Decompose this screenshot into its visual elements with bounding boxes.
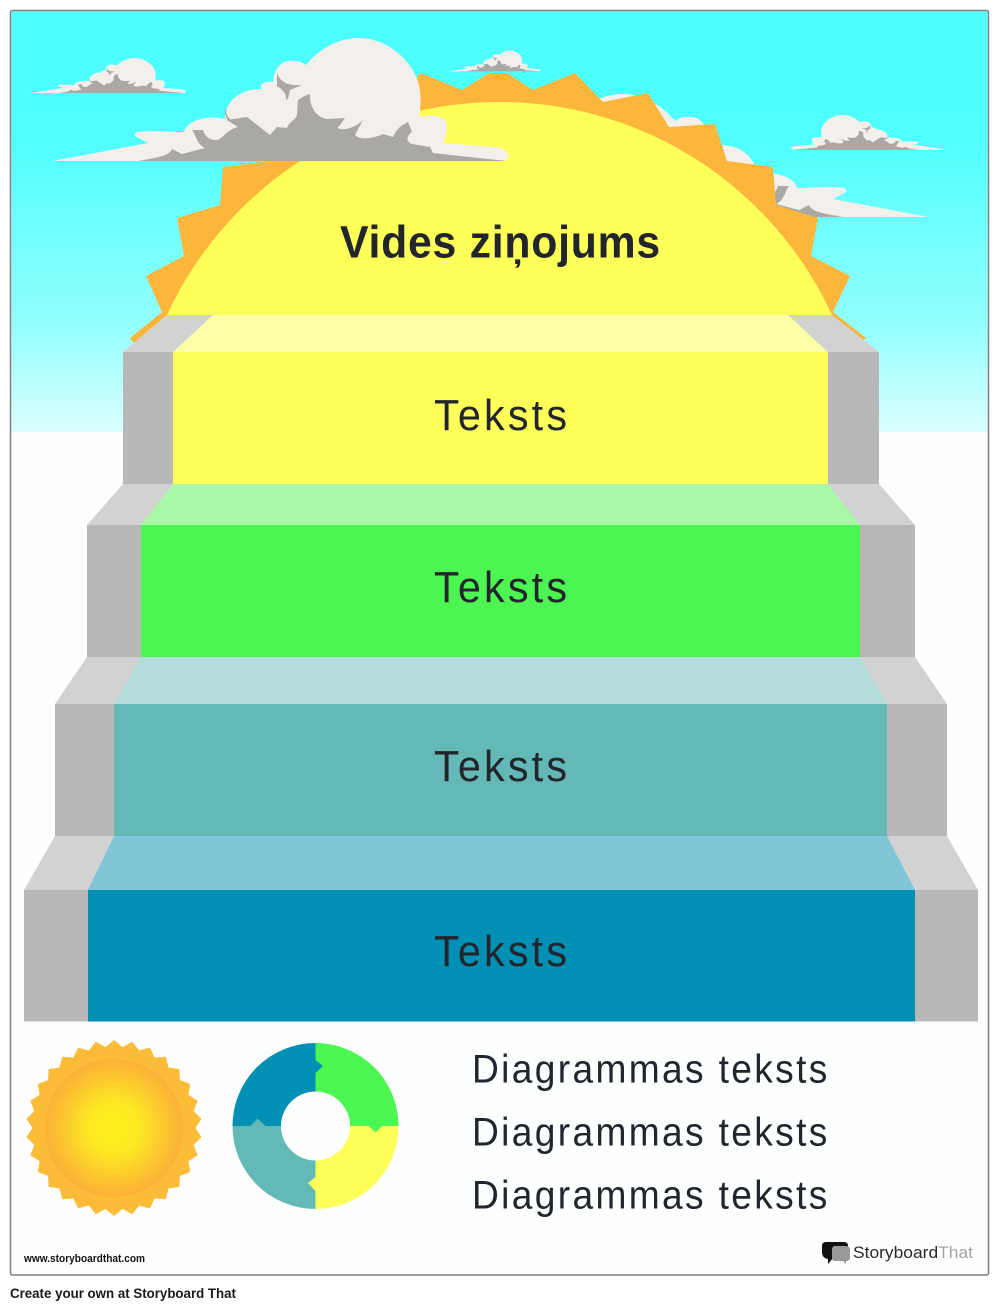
step 4: blue <box>24 836 978 1022</box>
step 3 label: Teksts <box>434 742 567 791</box>
step 2: green <box>87 484 915 657</box>
website url: www.storyboardthat.com <box>23 1253 145 1265</box>
legend line 1: Diagrammas teksts <box>472 1047 827 1092</box>
step 4 label: Teksts <box>434 927 567 976</box>
logo: Storyboard That: Storyboard That <box>853 1244 973 1262</box>
title: Vides ziņojums <box>340 218 660 268</box>
cloud: small right <box>791 115 947 150</box>
cloud: large right behind the sun <box>473 94 928 217</box>
legend line 2: Diagrammas teksts <box>472 1110 827 1155</box>
sun disc <box>167 102 832 315</box>
cloud: small top left <box>30 58 186 93</box>
step 2 label: Teksts <box>434 563 567 612</box>
legend text <box>472 1047 827 1218</box>
icon: small sun <box>26 1040 202 1216</box>
step 3: teal <box>55 657 947 836</box>
cloud: small top centre <box>448 50 540 71</box>
footer caption: Create your own at Storyboard That <box>10 1285 236 1301</box>
logo: Storyboard That <box>822 1242 973 1264</box>
step 1 label: Teksts <box>434 391 567 440</box>
step 1: yellow <box>123 315 879 484</box>
cloud: large left in front of the sun <box>53 38 508 161</box>
sun rays <box>130 73 866 343</box>
ring diagram <box>232 1043 398 1209</box>
legend line 3: Diagrammas teksts <box>472 1173 827 1218</box>
